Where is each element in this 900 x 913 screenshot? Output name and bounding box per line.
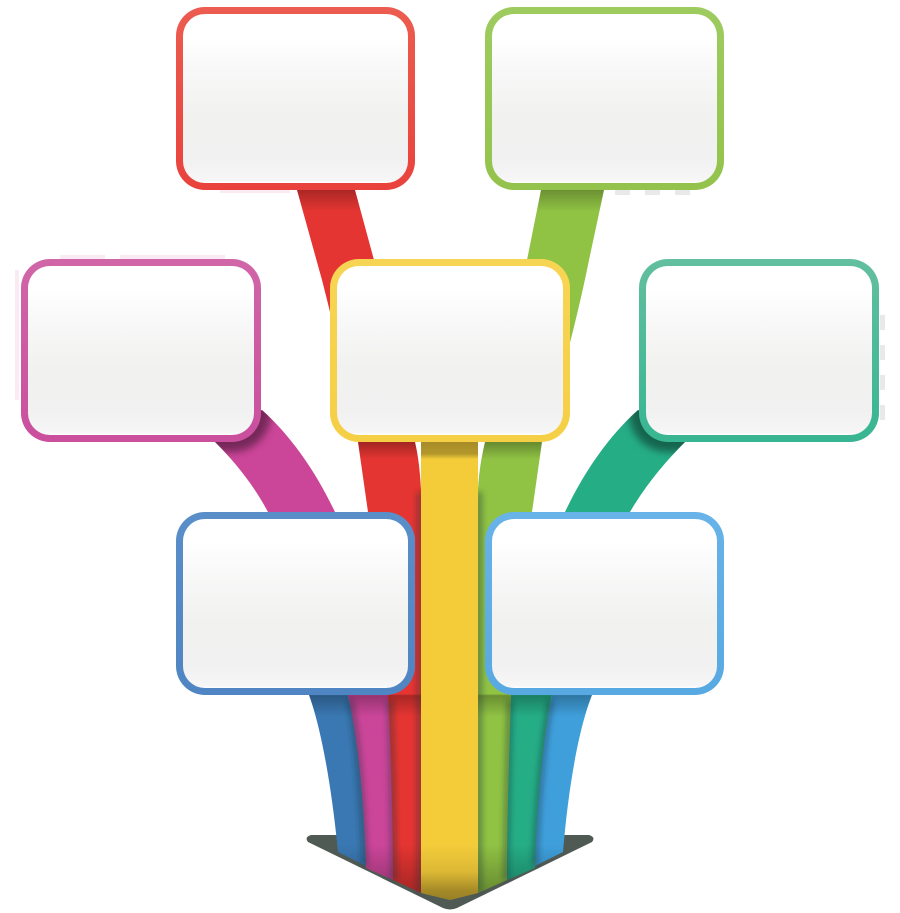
- box: red: [176, 7, 415, 190]
- arrowhead base: [307, 835, 593, 910]
- box: yellow: [330, 259, 570, 442]
- ribbon: red: [297, 190, 421, 893]
- ribbon: green: [478, 190, 604, 893]
- box: magenta: [21, 259, 261, 442]
- box: green: [485, 7, 724, 190]
- ribbon: blue: [309, 695, 366, 866]
- ribbons: [215, 190, 685, 900]
- box: blue: [176, 512, 415, 695]
- box: sky blue: [485, 512, 724, 695]
- ribbon: magenta: [215, 410, 393, 880]
- box: teal: [639, 259, 879, 442]
- ribbon: yellow: [421, 442, 478, 900]
- ribbon: sky blue: [535, 695, 592, 866]
- ribbon: teal: [507, 410, 685, 880]
